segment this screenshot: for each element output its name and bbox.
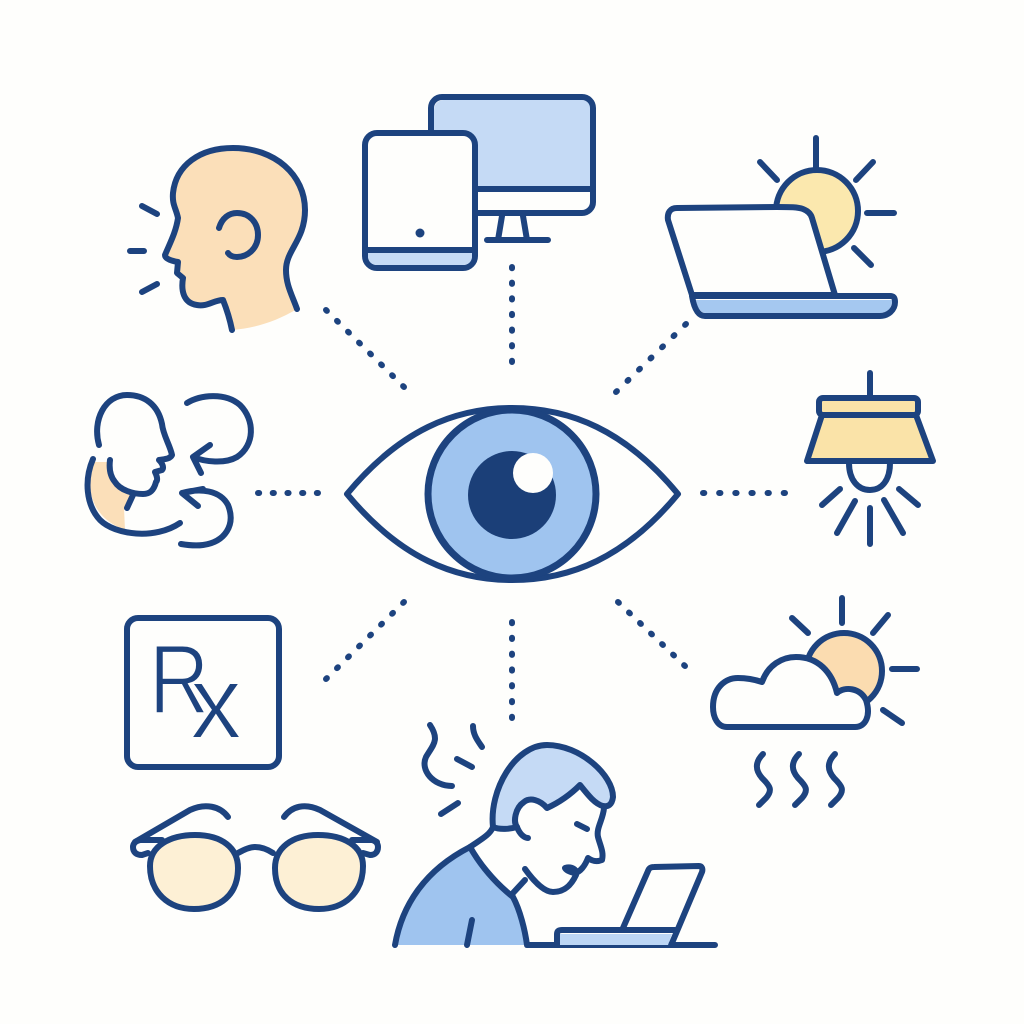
icon: central eye (347, 408, 678, 580)
icon: cloud with sun and humidity (713, 598, 917, 805)
icon: hanging lamp (807, 373, 933, 544)
icon: person hunched over laptop (395, 725, 715, 945)
icon: laptop with sunlight glare (668, 138, 895, 316)
icon: glasses (133, 806, 378, 909)
icon: head with headache (130, 148, 305, 330)
icon: prescription card: x (190, 645, 242, 761)
icon: prescription card: R (149, 626, 209, 735)
icon: prescription card (127, 618, 279, 767)
icon: monitor and tablet (365, 97, 593, 268)
icon: head with neck rotation arrows (88, 395, 251, 545)
dotted connectors (258, 267, 785, 718)
